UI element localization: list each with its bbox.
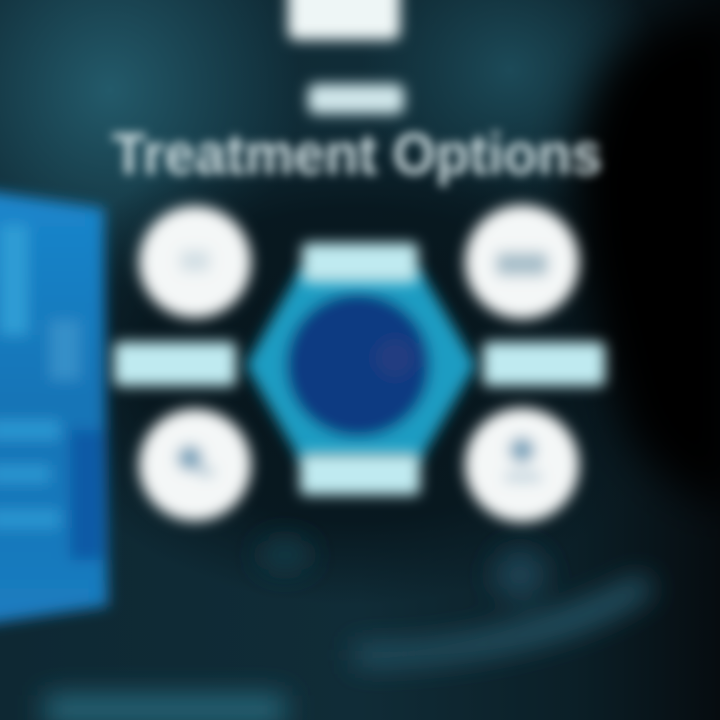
- light streaks at the bottom: [45, 539, 655, 720]
- icon circle: top right: [465, 205, 579, 319]
- icon circle: bottom right: [465, 408, 579, 522]
- center hexagon: [246, 270, 476, 460]
- panel: left blue screen: [0, 190, 108, 625]
- small label pill: [308, 84, 404, 114]
- icon circle: bottom left: [139, 409, 251, 521]
- label bar: right: [483, 342, 605, 386]
- label bar: top: [302, 243, 418, 283]
- silhouette: person at right: [575, 10, 720, 510]
- label bar: bottom: [300, 453, 420, 495]
- label bar: left: [114, 342, 236, 386]
- top white box: [288, 0, 400, 40]
- icon circle: top left: [139, 206, 251, 318]
- title: Treatment Options: [112, 122, 602, 187]
